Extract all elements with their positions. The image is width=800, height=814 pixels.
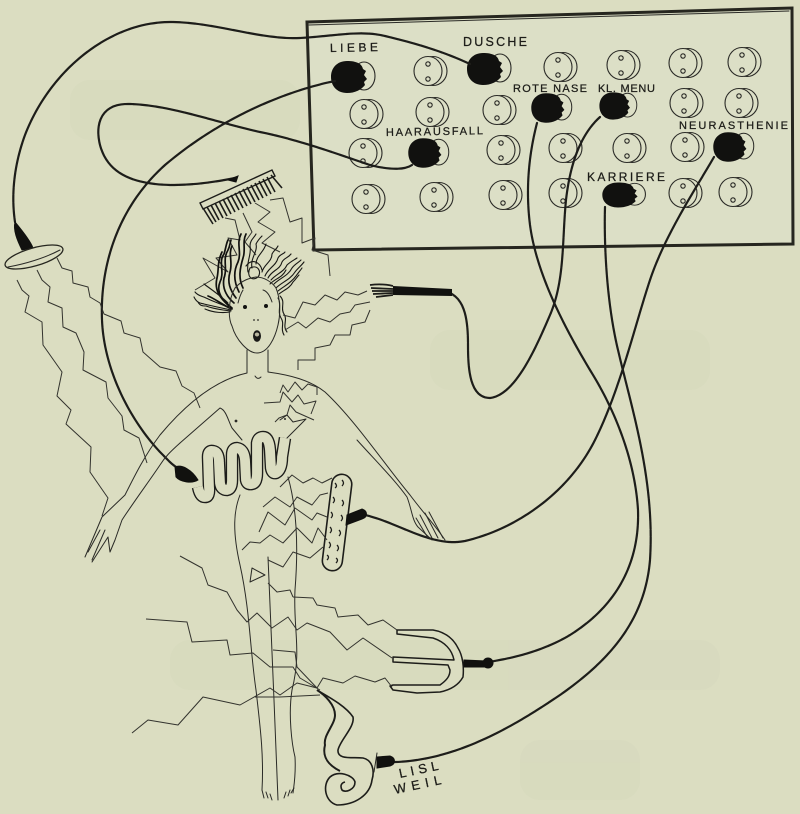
wire: Rote Nase to fork [488, 123, 638, 662]
signature [393, 758, 443, 797]
plugs [331, 53, 754, 207]
fork waves [132, 556, 397, 733]
massager roller [321, 473, 366, 572]
comb waves [195, 198, 330, 290]
label: Liebe: LIEBE [330, 40, 378, 55]
fork electrode [390, 630, 494, 693]
head [229, 277, 280, 353]
disc waves [17, 258, 200, 516]
chest waves [264, 382, 317, 438]
body outline [85, 350, 445, 800]
label: Rote Nase: ROTE NASE [513, 83, 587, 95]
massager waves [242, 475, 332, 597]
wire: Liebe to belly hose [102, 81, 335, 468]
wire: Neurasthenie to massager [360, 157, 714, 542]
disc electrode [3, 222, 200, 516]
wire: Kl. Menu to brush [450, 117, 600, 398]
label: Karriere: KARRIERE [587, 170, 665, 184]
faint bleed-through [70, 80, 720, 800]
label: Haarausfall: HAARAUSFALL [386, 125, 483, 139]
wire: Haarausfall to comb [98, 104, 412, 185]
wire: Dusche to disc [13, 22, 470, 222]
switchboard panel [307, 8, 793, 250]
label: Dusche: DUSCHE [463, 35, 527, 49]
label: Kl. Menu: KL. MENU [598, 83, 655, 95]
belly hose [175, 437, 285, 497]
label: Neurasthenie: NEURASTHENIE [679, 120, 788, 132]
signature: WEIL [393, 772, 443, 797]
signature: LISL [398, 758, 440, 781]
snake electrode [317, 690, 394, 805]
brush waves [283, 291, 370, 370]
hair [194, 234, 304, 335]
comb [200, 170, 282, 224]
wire: Karriere to snake [395, 207, 651, 762]
brush electrode [370, 284, 452, 297]
sockets [349, 48, 761, 214]
